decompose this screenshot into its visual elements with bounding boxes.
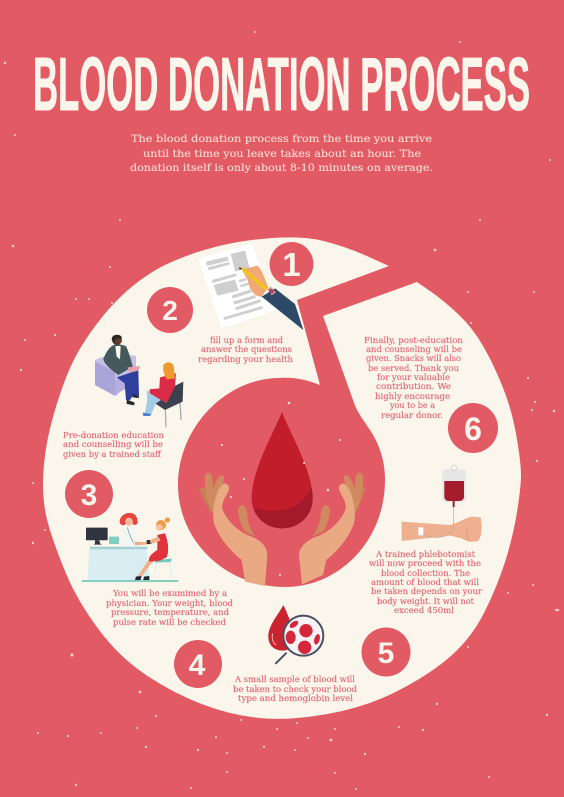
icon: central blood drop and hands	[198, 412, 366, 586]
woman on chair	[143, 362, 183, 427]
hand	[242, 266, 268, 297]
step 3 text	[106, 589, 233, 627]
badge 3: 3	[81, 479, 97, 512]
step 5 text: exceed 450ml	[394, 606, 454, 615]
step 6 text: regular donor.	[381, 411, 443, 420]
icon: doctor examining patient	[82, 513, 178, 582]
step 6 text: for your valuable	[377, 373, 450, 382]
intro text: donation itself is only about 8-10 minutes on average.	[130, 162, 433, 174]
step 2 text	[63, 431, 164, 459]
blood bag	[442, 469, 466, 502]
step 4 text: A small sample of blood will	[234, 675, 355, 684]
icon: consultation people	[95, 335, 183, 427]
monitor	[86, 528, 108, 540]
intro text	[130, 133, 433, 174]
step 3 text: physician. Your weight, blood	[106, 599, 233, 608]
doctor	[120, 525, 142, 547]
step 2 text: and counselling will be	[63, 440, 163, 449]
intro text: The blood donation process from the time you arrive	[131, 133, 432, 145]
right hand	[299, 473, 366, 584]
badge 4: 4	[189, 649, 206, 682]
step 6 text: given. Snacks will also	[366, 354, 461, 363]
badge 5	[362, 628, 410, 676]
icon: blood drop with magnifier	[268, 605, 323, 663]
cream ring shape	[43, 237, 521, 719]
step 3 text: pressure, temperature, and	[111, 608, 229, 617]
speckles on circle	[221, 402, 341, 576]
badge 2: 2	[162, 295, 178, 326]
badge 6	[448, 403, 498, 453]
badge 2	[147, 287, 193, 333]
desk	[87, 549, 150, 580]
arm	[402, 517, 482, 542]
step 4 text: be taken to check your blood	[233, 685, 357, 694]
sofa and man	[95, 335, 140, 405]
badge 1	[270, 242, 314, 286]
badge 5: 5	[378, 637, 394, 670]
floor	[82, 580, 178, 582]
badge 3	[65, 470, 113, 518]
step 6 text	[364, 336, 463, 420]
step 6 text: contribution. We	[376, 382, 451, 391]
step 5 text: body weight. It will not	[377, 597, 475, 606]
icon: form and writing hand	[198, 243, 303, 330]
intro text: until the time you leave takes about an hour. The	[143, 148, 421, 160]
step 6 text: be served. Thank you	[368, 364, 459, 373]
sleeve	[262, 288, 303, 330]
badge 4	[174, 640, 222, 688]
step 5 text: blood collection. The	[381, 569, 470, 578]
left hand	[198, 473, 267, 586]
step 6 text: you to be a	[389, 401, 435, 410]
step 1 text	[198, 336, 293, 364]
step 6 text: Finally, post-education	[364, 336, 463, 345]
step 5 text: A trained phlebotomist	[375, 550, 476, 559]
step 5 text	[369, 550, 482, 615]
step 4 text	[233, 675, 357, 703]
paper	[198, 243, 277, 328]
step 2 text: Pre-donation education	[63, 431, 164, 440]
icon: blood bag and arm	[402, 465, 482, 542]
step 4 text: type and hemoglobin level	[238, 694, 353, 703]
badge 6: 6	[464, 411, 482, 447]
step 6 text: and counseling will be	[366, 345, 462, 354]
step 3 text: You will be examimed by a	[112, 589, 227, 598]
step 5 text: be taken depends on your	[371, 587, 482, 596]
step 5 text: will now proceed with the	[369, 559, 481, 568]
badge 1: 1	[282, 246, 301, 283]
blood drop	[252, 412, 313, 528]
step 1 text: answer the questions	[201, 345, 292, 354]
step 5 text: amount of blood that will	[371, 578, 479, 587]
step 1 text: regarding your health	[198, 355, 293, 364]
step 2 text: given by a trained staff	[63, 450, 162, 459]
step 6 text: highly encourage	[375, 392, 450, 401]
step 3 text: pulse rate will be checked	[113, 618, 226, 627]
pencil	[239, 267, 267, 291]
step 1 text: fill up a form and	[210, 336, 283, 345]
patient	[155, 559, 172, 563]
